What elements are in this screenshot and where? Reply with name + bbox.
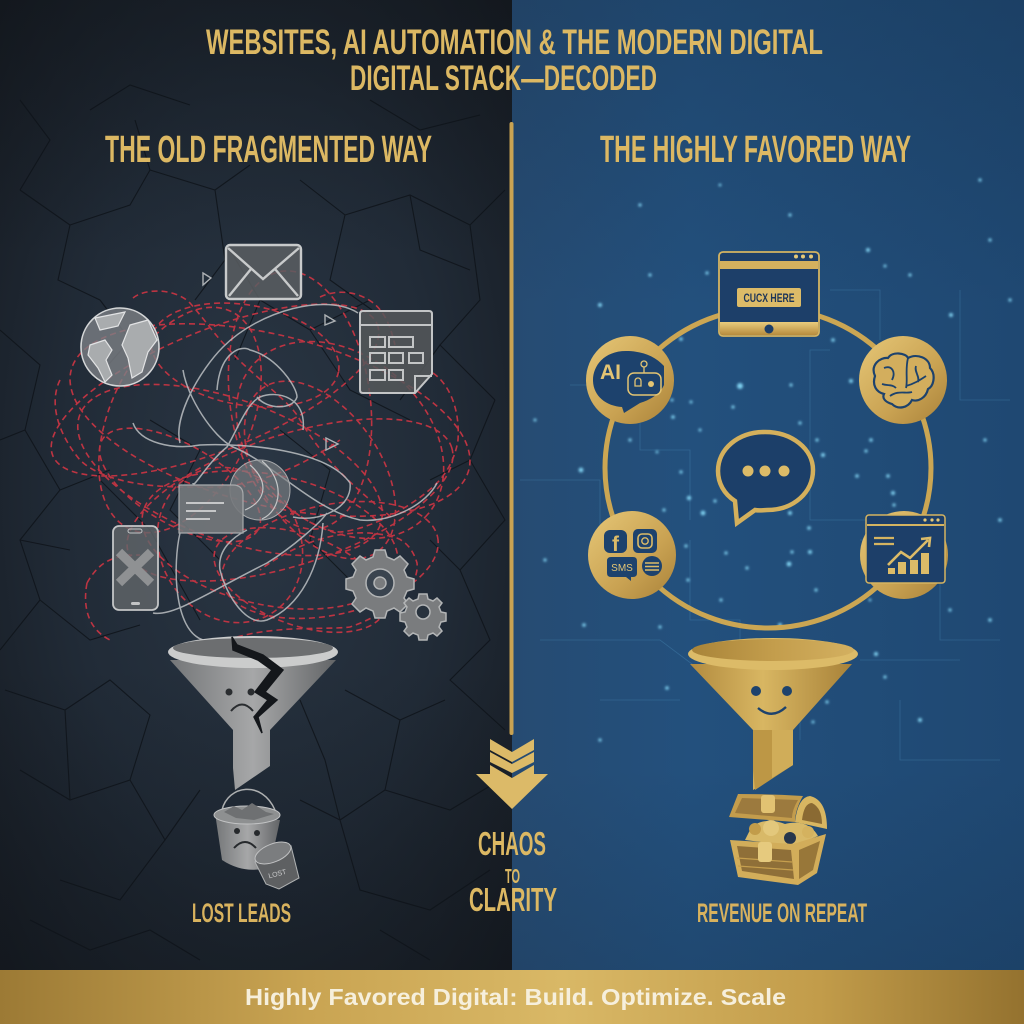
broken funnel	[168, 636, 338, 790]
icon: phone with x	[113, 526, 158, 610]
icon: browser layout	[360, 311, 432, 393]
icon: gears	[346, 550, 446, 640]
treasure chest	[729, 794, 827, 885]
title: DIGITAL STACK—DECODED	[350, 59, 657, 98]
panel: old fragmented way background	[0, 0, 512, 1024]
center caption: chaos to clarity	[469, 825, 557, 918]
chaos diagram: tangled connections	[30, 262, 489, 653]
icon: message	[642, 556, 662, 576]
node: social channels	[588, 511, 676, 599]
arrow: chaos to clarity	[476, 739, 548, 809]
node: analytics	[860, 511, 948, 599]
icon: message card	[179, 485, 243, 533]
funnel crack	[232, 637, 283, 733]
robot head	[628, 361, 661, 395]
label: revenue on repeat: REVENUE ON REPEAT	[697, 898, 867, 928]
node: ai chatbot	[586, 336, 674, 424]
central chat bubble	[718, 432, 813, 523]
icon: faded sphere	[230, 460, 290, 520]
sad face on funnel	[226, 688, 254, 711]
footer banner: Highly Favored Digital: Build. Optimize. Scale	[245, 984, 786, 1010]
node: brain	[859, 336, 947, 424]
integration ring	[605, 308, 931, 628]
center caption: chaos to clarity: TO	[505, 866, 520, 888]
icon: sms bubble: SMS	[611, 563, 633, 574]
heading: the old fragmented way: THE OLD FRAGMENTED WAY	[105, 129, 432, 171]
bucket of lost leads	[214, 789, 299, 889]
center caption: chaos to clarity: CLARITY	[469, 881, 557, 918]
label: lost leads: LOST LEADS	[192, 898, 291, 928]
node: website cta	[719, 252, 819, 336]
icon: facebook: f	[612, 533, 620, 556]
center caption: chaos to clarity: CHAOS	[478, 825, 546, 862]
icon: instagram	[633, 529, 657, 553]
panel: highly favored way background	[512, 0, 1024, 1024]
icon: globe	[81, 308, 159, 386]
smiling gold funnel	[688, 638, 858, 790]
footer banner	[0, 970, 1024, 1024]
small spilled bucket: LOST	[268, 869, 288, 880]
smiley face	[751, 686, 792, 714]
node: ai chatbot: AI	[600, 361, 621, 384]
title	[206, 23, 823, 98]
button: click here: CUCX HERE	[744, 291, 794, 305]
icon: envelope	[226, 245, 301, 299]
center divider line	[510, 122, 514, 735]
